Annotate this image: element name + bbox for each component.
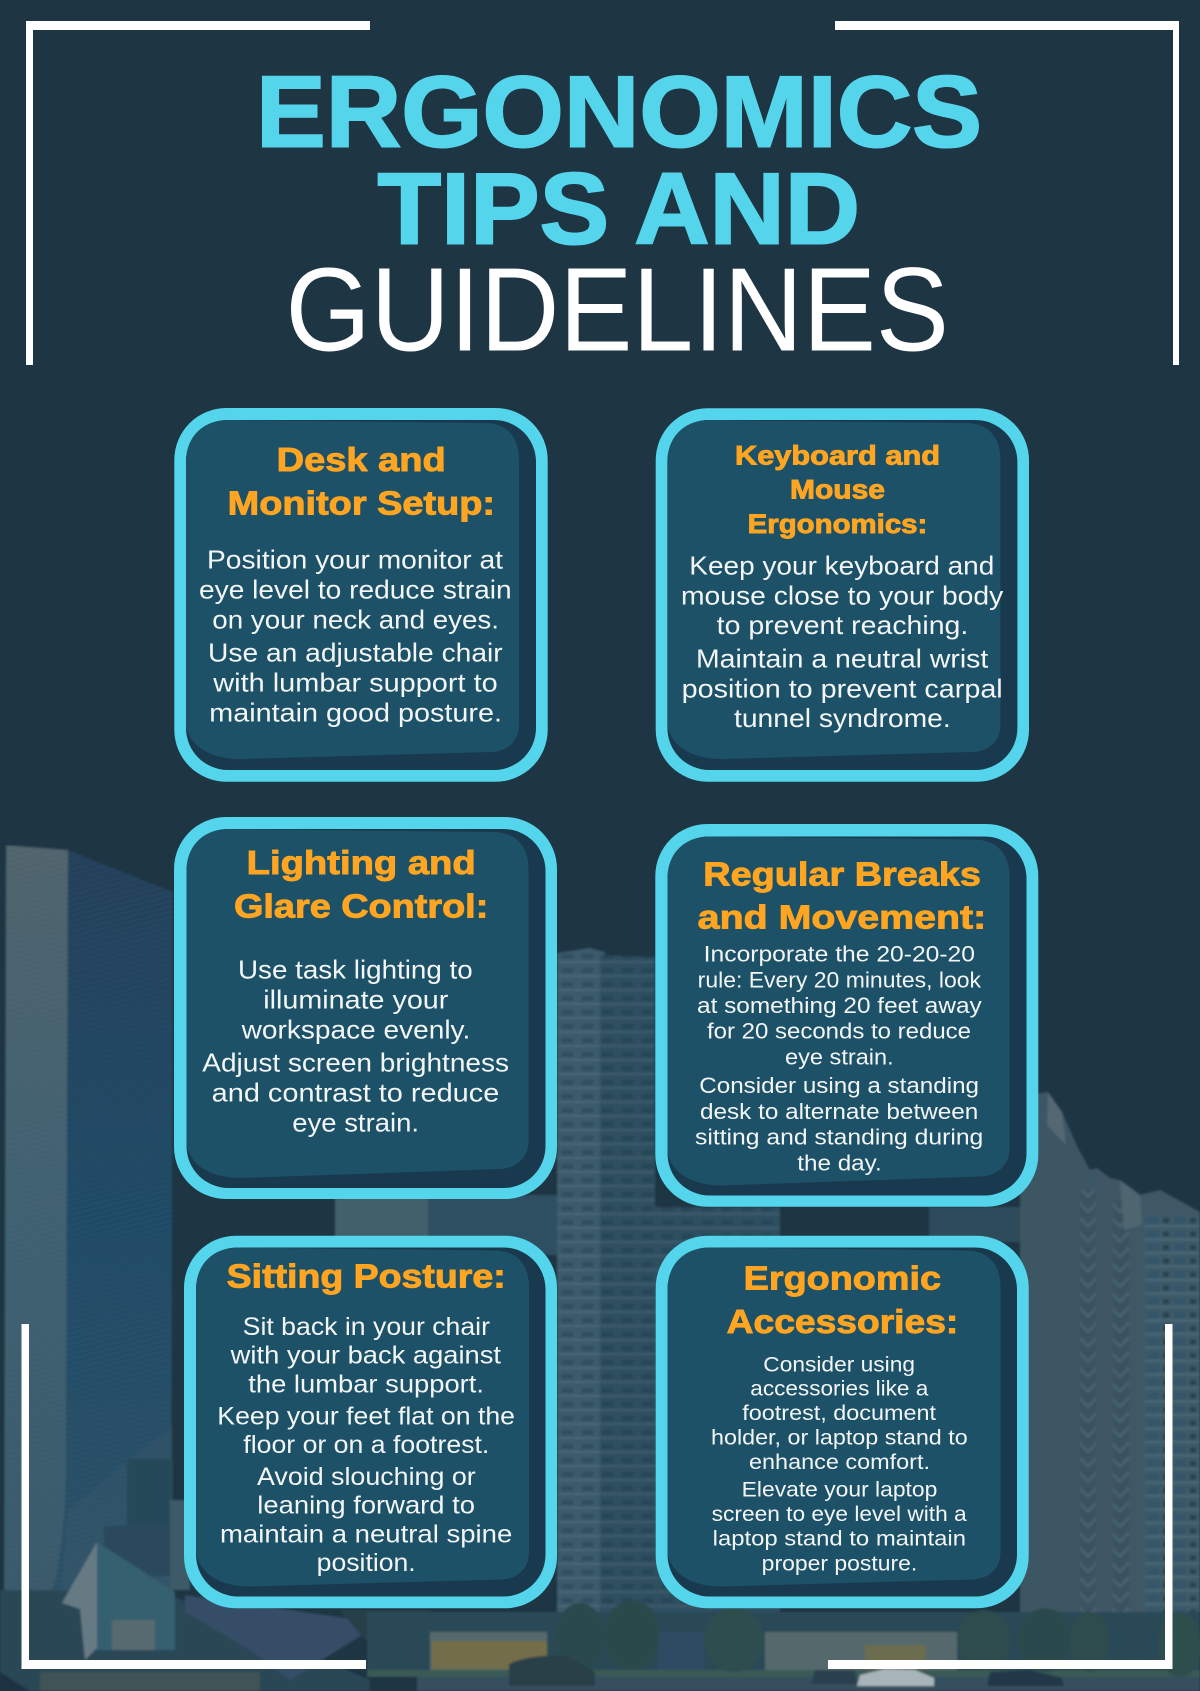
text: lighting and glare body: Adjust screen brightness bbox=[202, 1050, 509, 1078]
heading: desk and monitor setup: Desk and bbox=[277, 442, 446, 479]
text: keyboard and mouse body: position to prevent carpal bbox=[682, 675, 1003, 703]
heading: desk and monitor setup bbox=[228, 442, 495, 522]
panel: sitting posture bbox=[184, 1236, 557, 1608]
text: ergonomic accessories body bbox=[711, 1354, 968, 1575]
text: ergonomic accessories body: enhance comfort. bbox=[749, 1451, 930, 1474]
left tower bbox=[4, 845, 173, 1600]
text: ergonomic accessories body: Consider using bbox=[763, 1354, 915, 1377]
text: desk and monitor setup body: Position your monitor at bbox=[207, 546, 503, 574]
text: lighting and glare body bbox=[202, 956, 509, 1138]
text: lighting and glare body: eye strain. bbox=[292, 1110, 419, 1138]
text: regular breaks body: sitting and standing during bbox=[695, 1125, 983, 1150]
heading: regular breaks and movement: and Movement: bbox=[698, 899, 986, 936]
text: regular breaks body: Consider using a standing bbox=[699, 1073, 979, 1098]
text: regular breaks body: Incorporate the 20-20-20 bbox=[704, 942, 975, 967]
heading: regular breaks and movement bbox=[698, 857, 986, 936]
heading: regular breaks and movement: Regular Breaks bbox=[703, 857, 981, 894]
text: ergonomic accessories body: screen to eye level with a bbox=[712, 1503, 967, 1526]
text: desk and monitor setup body: eye level to reduce strain bbox=[199, 576, 512, 604]
title: GUIDELINES bbox=[286, 244, 949, 376]
text: lighting and glare body: and contrast to reduce bbox=[212, 1080, 499, 1108]
title: TIPS AND bbox=[378, 154, 860, 266]
text: keyboard and mouse body: mouse close to your body bbox=[681, 582, 1004, 610]
text: sitting posture body: Sit back in your chair bbox=[243, 1314, 490, 1341]
heading: ergonomic accessories: Ergonomic bbox=[744, 1261, 941, 1298]
text: regular breaks body: rule: Every 20 minutes, look bbox=[698, 967, 982, 992]
text: desk and monitor setup body: maintain good posture. bbox=[209, 700, 502, 728]
text: sitting posture body: floor or on a footrest. bbox=[243, 1432, 489, 1459]
panel: lighting and glare control bbox=[174, 817, 557, 1199]
heading: keyboard and mouse ergonomics: Mouse bbox=[790, 475, 885, 505]
heading: keyboard and mouse ergonomics: Keyboard and bbox=[735, 440, 940, 470]
bracket: top left corner bbox=[26, 21, 370, 365]
street level: storefronts, trees bbox=[367, 1600, 1200, 1677]
text: regular breaks body: eye strain. bbox=[785, 1044, 894, 1069]
text: sitting posture body: Keep your feet flat on the bbox=[217, 1403, 515, 1430]
text: sitting posture body bbox=[217, 1314, 515, 1577]
panel: keyboard and mouse ergonomics bbox=[656, 408, 1029, 782]
text: desk and monitor setup body: Use an adjustable chair bbox=[208, 640, 503, 668]
text: ergonomic accessories body: Elevate your laptop bbox=[742, 1479, 937, 1502]
text: regular breaks body: desk to alternate between bbox=[700, 1099, 978, 1124]
right tower group bbox=[1020, 1092, 1200, 1645]
text: ergonomic accessories body: proper posture. bbox=[762, 1552, 917, 1575]
text: ergonomic accessories body: accessories like a bbox=[750, 1378, 929, 1401]
heading: sitting posture: Sitting Posture: bbox=[227, 1259, 506, 1296]
title bbox=[256, 56, 982, 376]
title: ERGONOMICS bbox=[256, 56, 982, 168]
text: regular breaks body: at something 20 feet away bbox=[697, 993, 982, 1018]
text: desk and monitor setup body bbox=[199, 546, 512, 728]
text: keyboard and mouse body: Keep your keyboard and bbox=[689, 552, 994, 580]
text: sitting posture body: position. bbox=[317, 1550, 416, 1577]
text: sitting posture body: Avoid slouching or bbox=[257, 1464, 476, 1491]
text: desk and monitor setup body: with lumbar support to bbox=[212, 670, 498, 698]
text: keyboard and mouse body bbox=[681, 552, 1004, 733]
text: keyboard and mouse body: to prevent reaching. bbox=[717, 612, 968, 640]
heading: lighting and glare control bbox=[234, 845, 488, 925]
heading: lighting and glare control: Glare Control: bbox=[234, 888, 488, 925]
text: ergonomic accessories body: footrest, document bbox=[742, 1402, 936, 1425]
text: sitting posture body: with your back against bbox=[230, 1343, 501, 1370]
text: lighting and glare body: Use task lighting to bbox=[238, 956, 473, 984]
text: sitting posture body: maintain a neutral spine bbox=[220, 1521, 512, 1548]
heading: keyboard and mouse ergonomics bbox=[735, 440, 940, 539]
background: city skyline photo bbox=[0, 845, 1200, 1691]
heading: keyboard and mouse ergonomics: Ergonomics: bbox=[748, 509, 927, 539]
panel: regular breaks and movement bbox=[655, 824, 1038, 1207]
text: keyboard and mouse body: tunnel syndrome. bbox=[734, 705, 951, 733]
text: ergonomic accessories body: laptop stand to maintain bbox=[713, 1528, 966, 1551]
central tower bbox=[557, 948, 780, 1640]
text: desk and monitor setup body: on your neck and eyes. bbox=[212, 606, 499, 634]
panel: desk and monitor setup bbox=[174, 408, 548, 782]
base of left tower: angular roofs bbox=[0, 1542, 430, 1691]
text: sitting posture body: leaning forward to bbox=[257, 1493, 475, 1520]
text: lighting and glare body: workspace evenly. bbox=[241, 1016, 470, 1044]
text: ergonomic accessories body: holder, or laptop stand to bbox=[711, 1426, 968, 1449]
bracket: bottom right corner bbox=[828, 1324, 1172, 1669]
text: regular breaks body bbox=[695, 942, 983, 1175]
bracket: top right corner bbox=[835, 21, 1179, 365]
heading: ergonomic accessories bbox=[727, 1261, 958, 1341]
bracket: bottom left corner bbox=[22, 1324, 366, 1669]
text: keyboard and mouse body: Maintain a neutral wrist bbox=[696, 645, 988, 673]
heading: ergonomic accessories: Accessories: bbox=[727, 1304, 958, 1341]
heading: desk and monitor setup: Monitor Setup: bbox=[228, 485, 495, 522]
heading: lighting and glare control: Lighting and bbox=[247, 845, 476, 882]
centre-left low building bbox=[335, 1195, 560, 1255]
text: lighting and glare body: illuminate your bbox=[263, 986, 449, 1014]
road and cars bbox=[417, 1656, 1200, 1691]
text: regular breaks body: for 20 seconds to reduce bbox=[707, 1019, 971, 1044]
right low block between cards bbox=[929, 1207, 1039, 1242]
panel: ergonomic accessories bbox=[656, 1236, 1029, 1608]
text: sitting posture body: the lumbar support. bbox=[248, 1372, 484, 1399]
text: regular breaks body: the day. bbox=[797, 1150, 882, 1175]
